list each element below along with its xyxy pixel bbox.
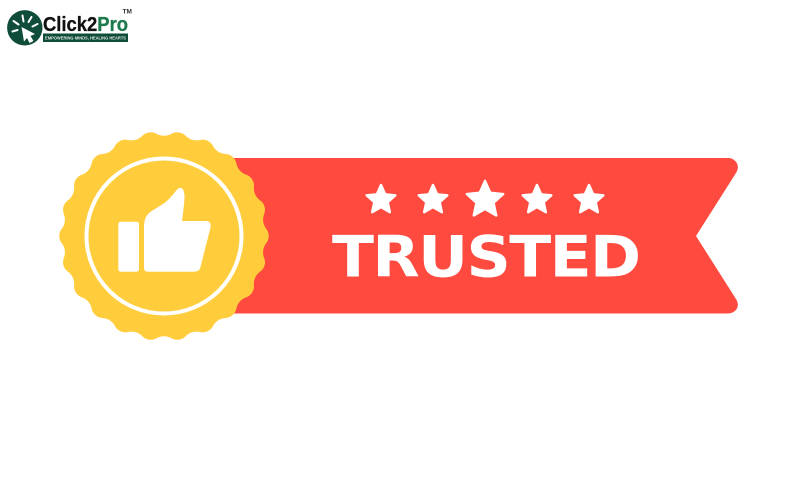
star 1 [367, 185, 395, 212]
star 4 [523, 185, 551, 212]
five white stars [367, 181, 603, 215]
logo: Click2Pro [7, 8, 132, 46]
red ribbon banner [200, 158, 738, 314]
seal scalloped edge [59, 132, 269, 340]
seal white ring [86, 158, 242, 314]
star 2 [419, 185, 447, 212]
logo tagline bar: EMPOWERING MINDS, HEALING HEARTS [45, 36, 126, 40]
star 5 [575, 185, 603, 212]
icon: thumbs up [118, 188, 211, 272]
star 3: large centre star [467, 181, 503, 215]
trademark mark: TM [122, 8, 132, 16]
logo wordmark: Click2Pro [43, 14, 128, 36]
logo icon: green circle with cursor [7, 10, 42, 46]
heading: TRUSTED: TRUSTED [332, 224, 639, 290]
yellow scalloped seal [59, 132, 269, 340]
